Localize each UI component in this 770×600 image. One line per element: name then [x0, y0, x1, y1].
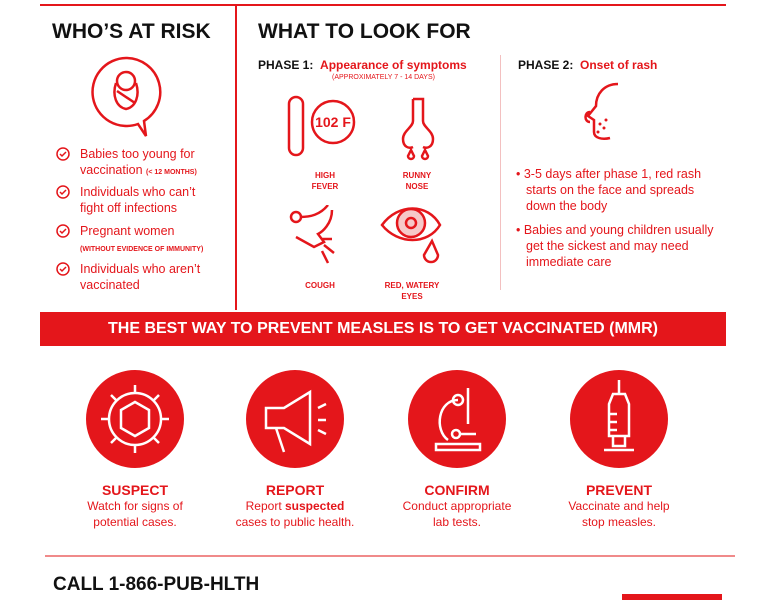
step: report: Report suspected [246, 499, 344, 513]
heading: who's at risk: WHO’S AT RISK [52, 20, 211, 43]
icon: thermometer fever: 102 F [315, 114, 351, 130]
icon: prevent syringe [570, 370, 668, 468]
label: red watery eyes: EYES [401, 292, 423, 301]
list: at-risk groups: Individuals who aren’t [80, 262, 200, 276]
banner: THE BEST WAY TO PREVENT MEASLES IS TO GET VACCINATED (MMR) [108, 320, 658, 337]
step: suspect: potential cases. [93, 515, 177, 529]
step: confirm [403, 482, 511, 529]
label: high fever [312, 171, 338, 191]
step: prevent: Vaccinate and help [568, 499, 670, 513]
icon: suspect virus [86, 370, 184, 468]
step: report: cases to public health. [236, 515, 354, 529]
step: suspect: SUSPECT [102, 482, 168, 498]
step: confirm: lab tests. [433, 515, 481, 529]
text: phase 2 bullets: • 3-5 days after phase 1, red rash starts on the face and spreads down the body [516, 167, 701, 213]
icon: baby speech bubble [91, 56, 162, 137]
step: report [236, 482, 354, 529]
step: prevent: stop measles. [582, 515, 656, 529]
list: at-risk groups: vaccination (< 12 MONTHS) [80, 163, 197, 177]
phase 2 heading: PHASE 2: Onset of rash [518, 58, 657, 72]
list: at-risk groups: (WITHOUT EVIDENCE OF IMMUNITY) [80, 246, 203, 253]
text: phase 2 bullets: • Babies and young children usually get the sickest and may need immediate care [516, 223, 714, 269]
label: runny nose: RUNNY [403, 171, 431, 180]
top rule [40, 4, 726, 6]
step: confirm: CONFIRM [424, 482, 490, 498]
phase 1 heading: PHASE 1: Appearance of symptoms [258, 58, 467, 72]
label: red watery eyes [385, 281, 440, 301]
step: prevent [568, 482, 670, 529]
label: red watery eyes: RED, WATERY [385, 281, 439, 290]
icon: cough [290, 205, 335, 264]
icon: nose [402, 98, 434, 160]
list: at-risk groups: vaccinated [80, 278, 140, 292]
icon: thermometer fever [288, 96, 356, 156]
list: at-risk groups [56, 147, 203, 292]
step: confirm: Conduct appropriate [403, 499, 511, 513]
text: (APPROXIMATELY 7 - 14 DAYS) [332, 74, 435, 81]
step: suspect [87, 482, 183, 529]
label: high fever: HIGH [315, 171, 335, 180]
icon: report megaphone [246, 370, 344, 468]
banner [40, 312, 726, 346]
text: phase 2 bullets [516, 167, 714, 269]
label: runny nose [403, 171, 431, 191]
label: cough: COUGH [305, 281, 335, 290]
label: runny nose: NOSE [406, 182, 428, 191]
call line: CALL 1-866-PUB-HLTH [53, 574, 259, 595]
list: at-risk groups: Individuals who can’t [80, 185, 195, 199]
list: at-risk groups: fight off infections [80, 201, 177, 215]
logo fragment [622, 594, 722, 600]
step: suspect: Watch for signs of [87, 499, 183, 513]
heading: what to look for: WHAT TO LOOK FOR [258, 20, 471, 43]
bottom rule [45, 555, 735, 557]
list: at-risk groups: Pregnant women [80, 224, 175, 238]
icon: watery eye [380, 207, 442, 264]
label: high fever: FEVER [312, 182, 338, 191]
step: prevent: PREVENT [586, 482, 652, 498]
list: at-risk groups: Babies too young for [80, 147, 195, 161]
step: report: REPORT [266, 482, 324, 498]
column divider [235, 4, 237, 310]
icon: confirm microscope [408, 370, 506, 468]
phase divider [500, 55, 501, 290]
icon: face rash [584, 82, 618, 140]
